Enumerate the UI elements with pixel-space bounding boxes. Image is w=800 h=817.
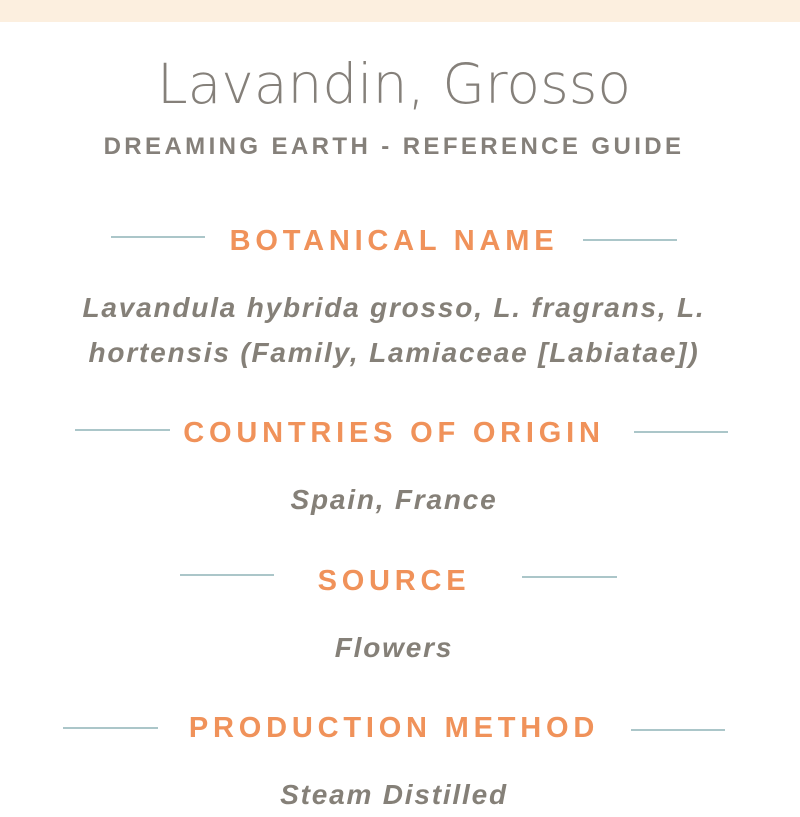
text: botanical name: hortensis (Family, Lamiaceae [Labiatae]) [89, 337, 699, 368]
heading: production method: PRODUCTION METHOD [189, 712, 599, 744]
text: countries: Spain, France [290, 484, 498, 515]
text: botanical name [82, 292, 706, 368]
heading: source: SOURCE [318, 565, 470, 597]
text: botanical name: Lavandula hybrida grosso, L. fragrans, L. [82, 292, 706, 323]
heading: countries of origin: COUNTRIES OF ORIGIN [183, 417, 605, 449]
heading: botanical name: BOTANICAL NAME [230, 225, 558, 257]
text: production method: Steam Distilled [280, 779, 508, 810]
subtitle: DREAMING EARTH - REFERENCE GUIDE [104, 133, 684, 160]
top band [0, 0, 800, 22]
text: source: Flowers [335, 632, 453, 663]
title: Lavandin, Grosso [157, 52, 631, 116]
